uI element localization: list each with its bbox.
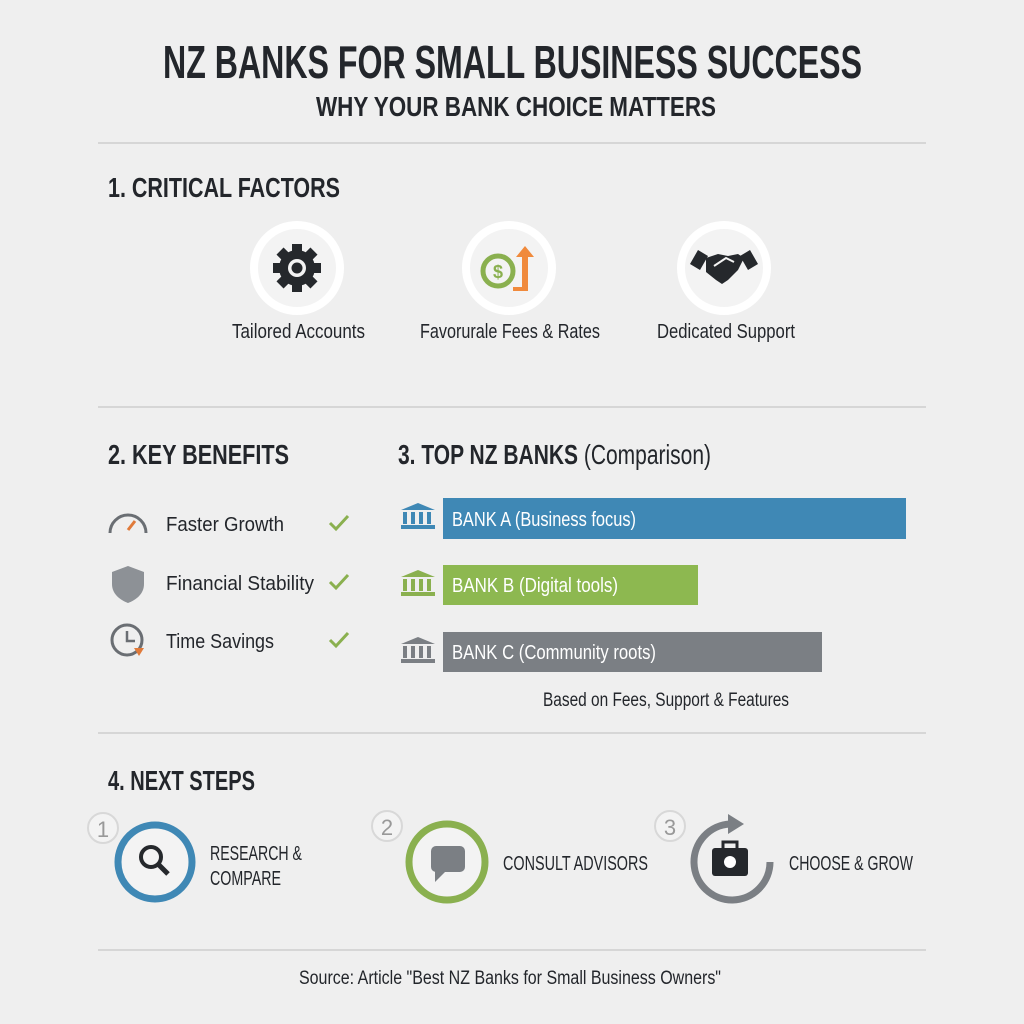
benefits list: Faster Growth [166,514,284,536]
source: Source: Article "Best NZ Banks for Small Business Owners" [299,968,721,989]
icon: clock [112,625,144,656]
bar B [443,565,698,605]
labels: critical factors: Tailored Accounts [232,321,365,343]
step 2: CONSULT ADVISORS [503,853,648,875]
bar A: BANK A (Business focus) [452,509,636,531]
text: Dedicated Support [657,321,795,343]
bar chart: banks [401,498,906,672]
heading: key benefits: 2. KEY BENEFITS [108,439,289,470]
icon: gauge [110,515,146,533]
step 1: RESEARCH & [210,843,302,865]
step 3 [655,811,913,900]
text: Favorurale Fees & Rates [420,321,600,343]
checks [330,516,348,646]
icon: gear [254,225,340,311]
icon: shield [112,566,144,603]
benefits list: Financial Stability [166,573,314,595]
step 1 [88,813,302,899]
icon: dollar up [466,225,552,311]
heading: top banks: 3. TOP NZ BANKS (Comparison) [398,439,711,470]
icon: dollar up: $ [493,262,503,282]
step 1: 1 [97,817,109,842]
step 3: 3 [664,815,676,840]
heading: critical factors: 1. CRITICAL FACTORS [108,172,340,203]
step 2 [372,811,648,900]
subtitle: WHY YOUR BANK CHOICE MATTERS [316,91,716,122]
icon: handshake [681,225,767,311]
bar A [443,498,906,539]
benefits list: Time Savings [166,631,274,653]
benefits list [110,514,348,656]
step 2: 2 [381,815,393,840]
chart note: Based on Fees, Support & Features [543,690,789,711]
bar C [443,632,822,672]
step 3: CHOOSE & GROW [789,853,913,875]
step 1: COMPARE [210,868,281,890]
bar B: BANK B (Digital tools) [452,575,618,597]
heading: next steps: 4. NEXT STEPS [108,765,255,796]
bar C: BANK C (Community roots) [452,642,656,664]
